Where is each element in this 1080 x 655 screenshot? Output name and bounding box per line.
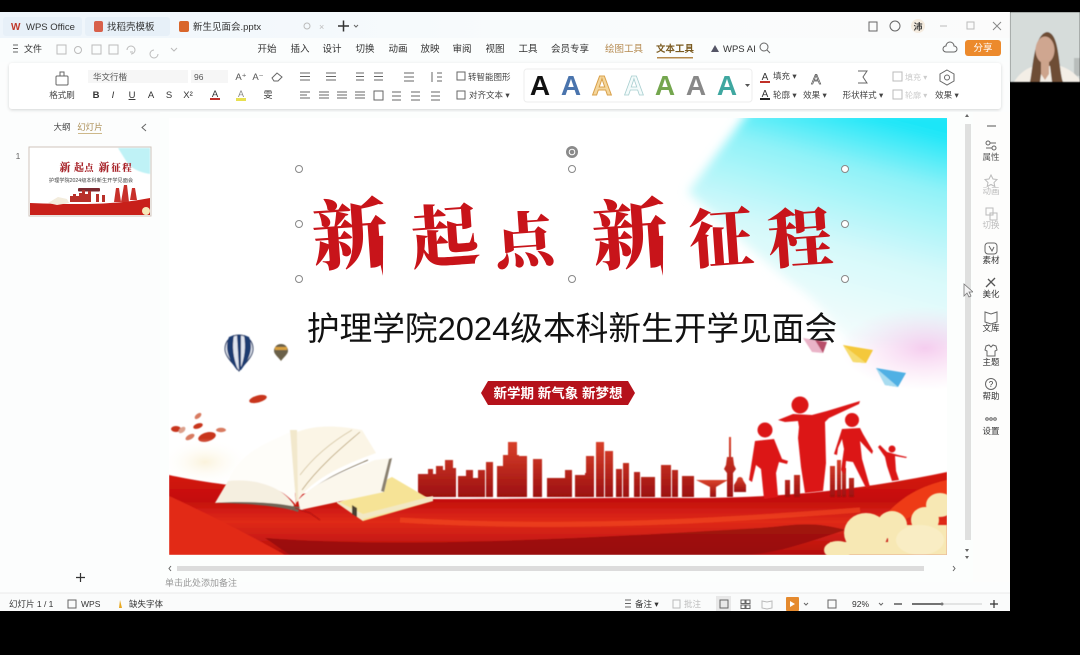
WordArt styles gallery: A — [592, 70, 612, 101]
navigator tabs: 幻灯片 — [77, 122, 103, 132]
sidebar item: help — [982, 378, 1000, 401]
notes area: 单击此处添加备注 — [165, 577, 237, 588]
menu tabs: 动画 — [388, 44, 408, 55]
figure: right runner — [834, 413, 873, 488]
status bar — [0, 593, 1010, 611]
font selectors: 96 — [194, 72, 204, 82]
shape styles — [843, 71, 884, 100]
slide thumbnail: 新 — [60, 160, 70, 174]
WPS cloud status — [68, 599, 101, 609]
sidebar item: library: 文库 — [982, 323, 1000, 333]
WordArt styles gallery: A — [561, 70, 581, 101]
font formatting buttons: X² — [183, 90, 193, 101]
red ribbon — [169, 472, 947, 555]
font formatting buttons: A — [238, 89, 244, 99]
ribbon toolbar — [9, 63, 1001, 109]
sidebar item: transition — [982, 208, 1000, 230]
font selectors — [88, 70, 282, 83]
presenter face — [1036, 36, 1054, 64]
shape effects: 效果 ▾ — [935, 90, 960, 100]
presenter hair — [1030, 32, 1063, 82]
WordArt styles gallery: A — [530, 70, 550, 101]
sidebar item: theme: 主题 — [982, 357, 1000, 367]
sidebar item: properties — [982, 141, 1000, 162]
disabled shape tools — [893, 72, 927, 100]
menu tabs: WPS AI — [723, 44, 756, 55]
menu tabs: 开始 — [257, 43, 277, 55]
sidebar item: help: ? — [989, 380, 994, 389]
fill and outline — [760, 71, 797, 100]
font formatting buttons: I — [112, 90, 115, 101]
tab: template: 找稻壳模板 — [107, 21, 155, 33]
menu tabs: 放映 — [420, 43, 440, 55]
editing area background — [160, 112, 978, 582]
sidebar item: properties: 属性 — [982, 152, 1000, 162]
clouds — [824, 493, 954, 559]
main title: 征 — [687, 202, 756, 277]
title bar — [0, 12, 1010, 38]
sidebar item: help: 帮助 — [982, 391, 1000, 401]
view buttons — [716, 596, 772, 611]
paragraph buttons — [300, 72, 442, 100]
figure: small runner — [878, 445, 907, 481]
file menu: 文件 — [24, 43, 42, 54]
missing font warning: 缺失字体 — [129, 599, 164, 609]
slide thumbnail: 护理学院2024级本科新生开学见面会 — [49, 176, 133, 184]
slide navigator panel — [16, 122, 151, 582]
text effects — [803, 71, 828, 100]
file menu — [13, 43, 42, 54]
window controls: 沛 — [913, 21, 923, 32]
sidebar item: assets: 素材 — [982, 255, 1000, 265]
WordArt styles gallery: A — [717, 70, 737, 101]
slide thumbnail: 程 — [122, 162, 132, 174]
mouse cursor — [964, 284, 973, 297]
notes and comments buttons: 批注 — [684, 599, 702, 609]
font formatting buttons: A — [212, 89, 219, 100]
slogan banner — [481, 381, 635, 405]
menu tabs: 切换 — [355, 43, 375, 55]
main title: 新 — [309, 192, 391, 282]
paper planes — [803, 338, 906, 387]
disabled shape tools: 轮廓 ▾ — [905, 90, 927, 100]
sidebar item: animation — [982, 175, 1000, 196]
fill and outline: 填充 ▾ — [773, 71, 797, 81]
notes area — [165, 566, 955, 588]
shape styles: 形状样式 ▾ — [843, 90, 884, 100]
text effects: A — [811, 71, 821, 87]
main title: 点 — [492, 207, 562, 277]
hot air balloons — [225, 335, 288, 371]
slide thumbnail: 征 — [111, 162, 121, 174]
text effects: 效果 ▾ — [803, 90, 828, 100]
font formatting buttons: B — [93, 90, 100, 101]
fill and outline: A — [762, 72, 769, 83]
tab: template — [85, 17, 170, 36]
menu tabs: 视图 — [485, 43, 505, 55]
sidebar item: settings: 设置 — [982, 426, 1000, 436]
fill and outline: A — [762, 89, 769, 100]
open book — [215, 426, 392, 520]
WPS cloud status: WPS — [81, 599, 101, 609]
zoom controls — [828, 599, 998, 609]
slide — [169, 118, 947, 555]
sidebar item: transition: 切换 — [982, 220, 1000, 230]
new tab controls: × — [319, 22, 324, 32]
running silhouettes — [749, 396, 907, 499]
slide thumbnail — [29, 147, 151, 216]
navigator tabs — [53, 122, 146, 134]
menu tabs: 会员专享 — [551, 43, 589, 55]
font formatting buttons: 雯 — [263, 90, 273, 100]
main title: 程 — [766, 202, 835, 277]
sidebar item: settings — [982, 418, 1000, 436]
notes and comments buttons: 备注 ▾ — [635, 599, 659, 609]
sidebar item: beautify: 美化 — [982, 289, 1000, 299]
WordArt styles gallery — [524, 69, 752, 102]
font selectors: 华文行楷 — [93, 72, 128, 82]
menu tabs: 绘图工具 — [605, 43, 643, 55]
new tab controls — [304, 20, 358, 32]
figure: left runner — [749, 422, 788, 499]
presenter webcam — [1010, 12, 1080, 82]
sidebar item: library — [982, 312, 1000, 333]
tab: WPS Office — [3, 17, 82, 36]
cream glow behind book — [182, 439, 228, 474]
font selectors: A⁺ — [235, 72, 247, 83]
cloud and share button — [943, 40, 1001, 56]
disabled shape tools: 填充 ▾ — [905, 72, 927, 82]
menu row — [0, 38, 1010, 62]
menu tabs — [257, 43, 770, 58]
font selectors: A⁻ — [252, 72, 264, 83]
WordArt styles gallery: A — [686, 70, 706, 101]
sidebar item: assets — [982, 243, 1000, 265]
fill and outline: 轮廓 ▾ — [773, 90, 797, 100]
quick access icons — [57, 45, 177, 58]
city skyline — [418, 437, 854, 497]
main title — [309, 192, 835, 282]
vertical scrollbar — [965, 114, 971, 559]
sidebar item: animation: 动画 — [982, 186, 1000, 196]
smart shape and align text: 对齐文本 ▾ — [469, 90, 510, 100]
stacked yellow book — [337, 477, 433, 521]
subtitle: 护理学院2024级本科新生开学见面会 — [307, 310, 837, 347]
slide thumbnail: 新 — [98, 160, 110, 174]
slide number: 1 — [16, 151, 21, 161]
font formatting buttons — [93, 89, 273, 101]
right sidebar — [973, 112, 1010, 582]
smart shape and align text: 转智能图形 — [468, 72, 511, 82]
font formatting buttons: S — [166, 90, 172, 101]
format painter — [49, 72, 75, 100]
menu tabs: 工具 — [518, 44, 538, 55]
figure: main runner — [778, 396, 860, 493]
cloud and share button: 分享 — [973, 42, 993, 54]
WordArt styles gallery: A — [624, 70, 644, 101]
status bar: 幻灯片 1 / 1 — [9, 599, 54, 609]
sidebar item: theme — [982, 345, 1000, 367]
notes and comments buttons — [625, 599, 702, 609]
slide thumbnail: 点 — [84, 162, 94, 173]
add slide — [76, 573, 85, 582]
sidebar item: beautify — [982, 278, 1000, 299]
format painter: 格式刷 — [49, 90, 75, 100]
WordArt styles gallery: A — [655, 70, 675, 101]
flying petals — [171, 393, 268, 444]
menu tabs: 插入 — [290, 43, 310, 55]
main title: 起 — [408, 198, 482, 278]
menu tabs: 审阅 — [452, 43, 472, 55]
slideshow button — [786, 597, 808, 611]
tab: file: 新生见面会.pptx — [193, 21, 261, 33]
zoom controls: 92% — [852, 599, 869, 609]
smart shape and align text — [457, 72, 511, 100]
selection handles — [296, 146, 848, 282]
window controls — [869, 19, 1001, 33]
font formatting buttons: U — [129, 90, 136, 101]
black letterbox top — [0, 0, 1080, 12]
menu tabs: 设计 — [322, 43, 342, 55]
shape effects — [935, 70, 960, 100]
menu tabs: 文本工具 — [656, 43, 694, 55]
slide thumbnail: 起 — [74, 161, 84, 174]
sky gradient — [686, 118, 947, 381]
tab: WPS Office: WPS Office — [26, 22, 75, 33]
tab: WPS Office: W — [11, 22, 21, 33]
navigator tabs: 大纲 — [53, 122, 71, 132]
presenter white top — [1014, 66, 1080, 82]
slogan banner: 新学期 新气象 新梦想 — [493, 385, 623, 401]
font formatting buttons: A — [148, 90, 155, 101]
main title: 新 — [589, 192, 671, 282]
